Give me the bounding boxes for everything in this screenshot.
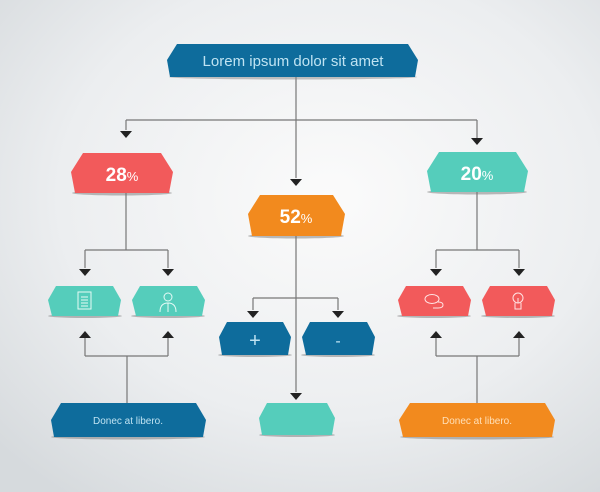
title box: Lorem ipsum dolor sit amet: [203, 53, 384, 70]
bottom box right: [399, 403, 555, 440]
box 20%: [427, 152, 528, 194]
red box: bulb icon: [481, 286, 555, 318]
bottom box right: Donec at libero.: [442, 416, 512, 427]
red box: chat icon: [397, 286, 471, 318]
box 28%: 28%: [106, 165, 139, 186]
title box: [167, 44, 418, 80]
arrows: [79, 131, 525, 400]
box 28%: [71, 153, 173, 196]
box 52%: 52%: [280, 207, 313, 228]
blue box: minus: -: [335, 333, 341, 350]
bottom box left: Donec at libero.: [93, 416, 163, 427]
connector lines: [85, 77, 519, 403]
teal box: document icon: [48, 286, 122, 318]
bottom box middle: [259, 403, 335, 437]
blue box: plus: [218, 322, 292, 357]
box 52%: [248, 195, 345, 238]
box 20%: 20%: [461, 164, 494, 185]
blue box: minus: [301, 322, 375, 357]
blue box: plus: +: [249, 330, 261, 352]
bottom box left: [51, 403, 206, 440]
teal box: person icon: [131, 286, 205, 318]
